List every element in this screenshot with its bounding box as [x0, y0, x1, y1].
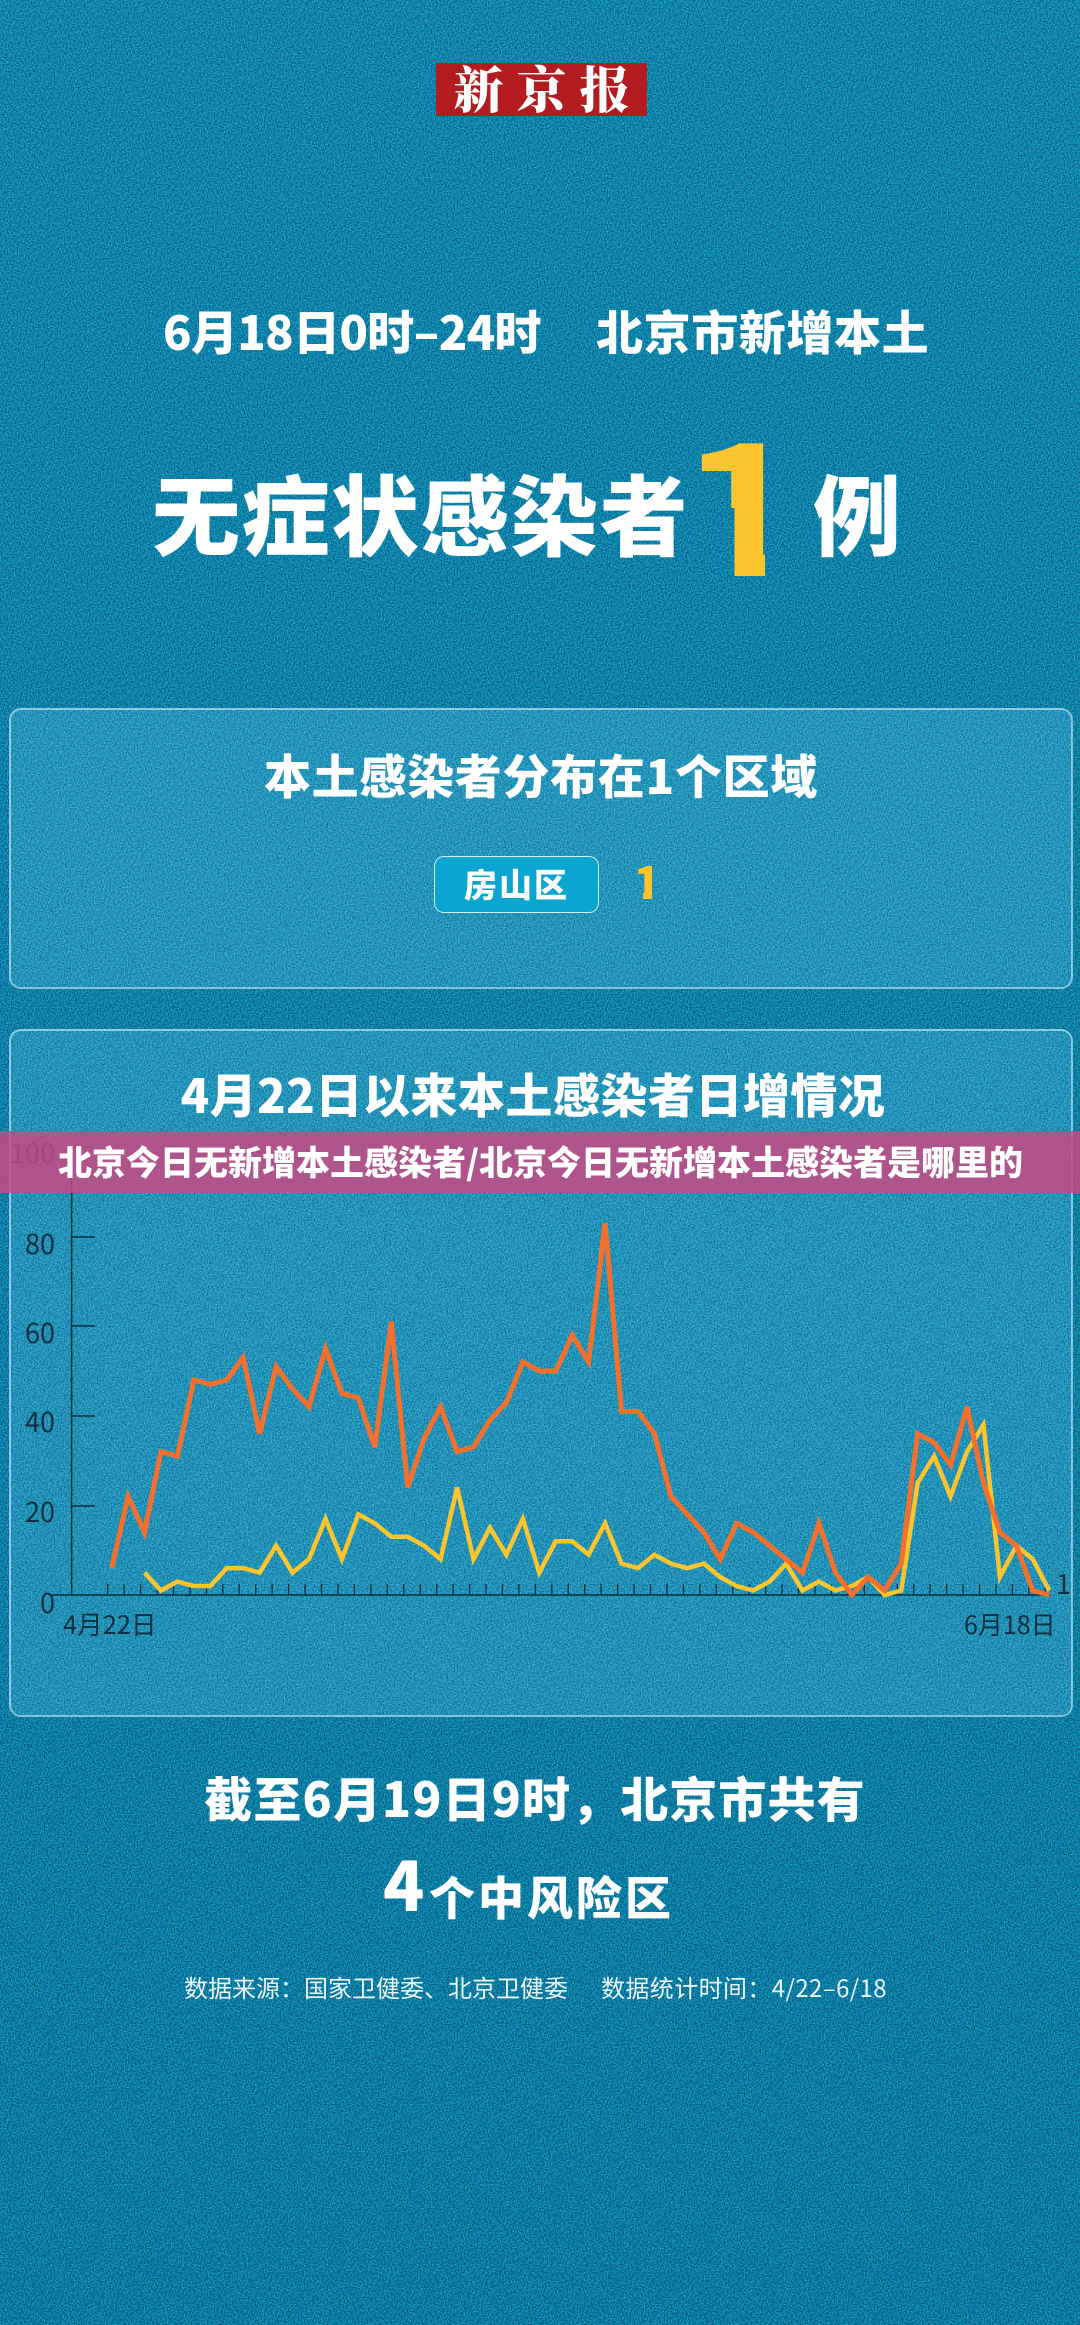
district count: 1 [634, 848, 661, 912]
line chart [10, 1132, 1071, 1642]
series: orange line [112, 1223, 1049, 1595]
panel heading: 4月22日以来本土感染者日增情况 [181, 1058, 885, 1127]
y-axis labels: 80 [25, 1223, 55, 1262]
x-axis labels [63, 1563, 1071, 1642]
y-axis labels: 0 [40, 1582, 55, 1621]
big yellow number: 1 [678, 368, 807, 628]
panel: daily increase chart [9, 1029, 1073, 1717]
heading: date and scope: 6月18日0时–24时 [163, 295, 541, 364]
text: medium risk intro: 截至6月19日9时，北京市共有 [204, 1761, 866, 1831]
district tag: 房山区 [464, 859, 569, 907]
heading: date and scope [163, 295, 929, 364]
footer: data source: 数据来源：国家卫健委、北京卫健委 [184, 1969, 568, 2004]
panel heading: 本土感染者分布在1个区域 [264, 739, 818, 808]
y-axis labels: 20 [25, 1491, 55, 1530]
series: yellow line [144, 1425, 1049, 1595]
headline: asymptomatic cases count [152, 443, 901, 576]
y-axis labels: 40 [25, 1401, 55, 1440]
panel: district distribution [9, 708, 1073, 989]
footer: data source: 数据统计时间：4/22–6/18 [601, 1969, 887, 2004]
footer: data source [184, 1969, 887, 2004]
text: medium risk count [383, 1832, 674, 1931]
district tag [434, 856, 599, 913]
text: medium risk count: 个中风险区 [429, 1863, 674, 1929]
title band: 北京今日无新增本土感染者/北京今日无新增本土感染者是哪里的 [58, 1136, 1023, 1185]
heading: date and scope: 北京市新增本土 [596, 295, 929, 364]
x-axis labels: 4月22日 [63, 1605, 156, 1642]
logo: 新京报: 新京报 [454, 51, 642, 123]
x-axis labels: 6月18日 [964, 1606, 1056, 1642]
y-axis labels [10, 1132, 55, 1621]
x-axis labels: 1 [1056, 1563, 1071, 1602]
y-axis labels: 60 [25, 1312, 55, 1351]
headline text: 无症状感染者 [152, 448, 689, 575]
logo: 新京报 [436, 63, 647, 116]
y-axis labels: 100 [10, 1132, 55, 1171]
text: medium risk count: 4 [383, 1832, 424, 1931]
unit: 例 [813, 448, 901, 575]
